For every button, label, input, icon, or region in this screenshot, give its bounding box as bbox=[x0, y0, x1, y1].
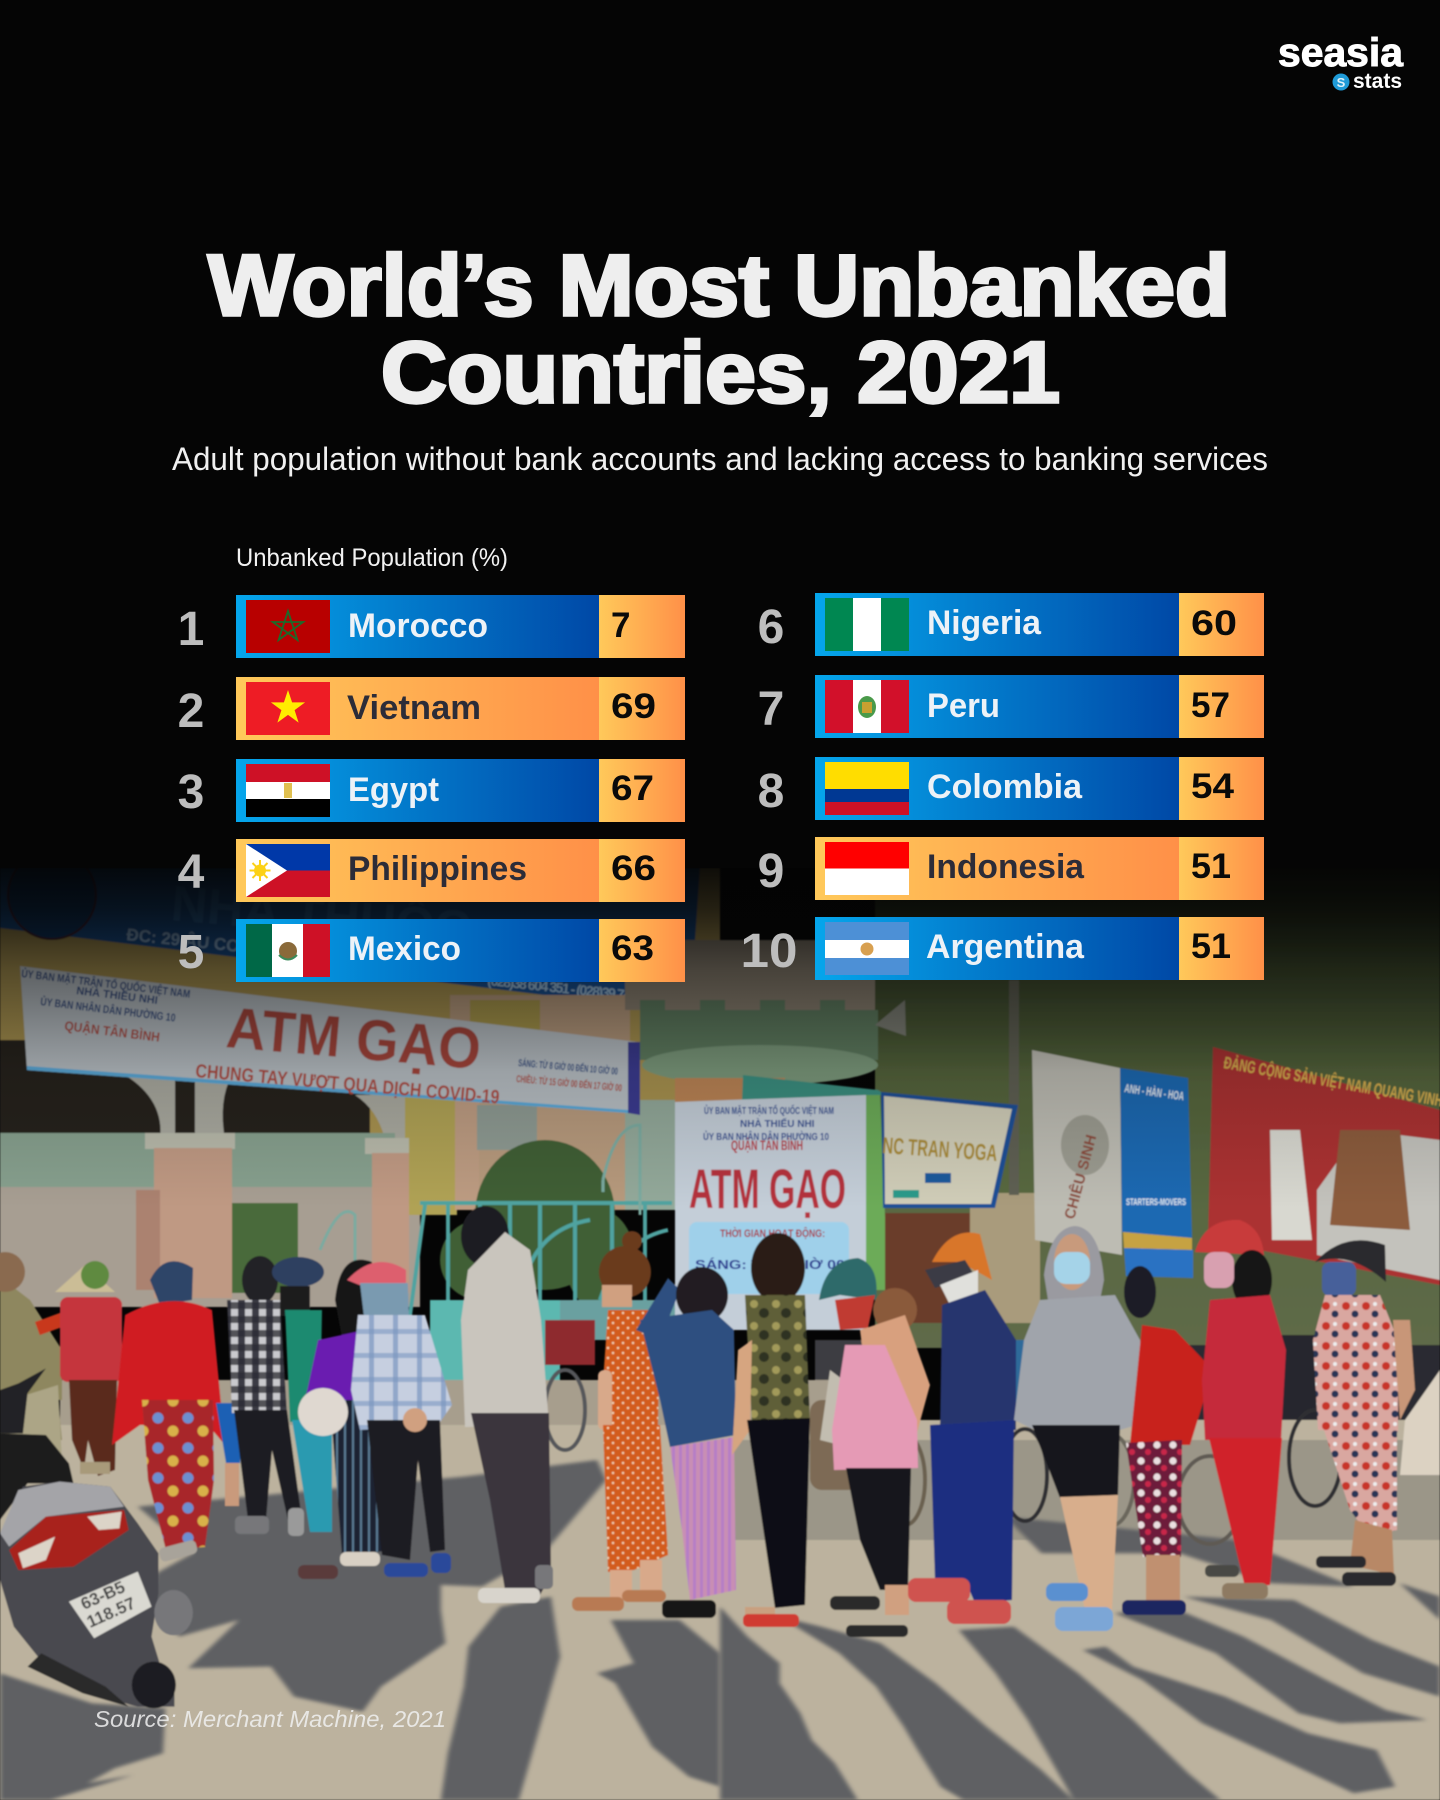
ranking row 7: Peru: Peru bbox=[927, 687, 1000, 725]
ranking row 1: Morocco bbox=[178, 595, 685, 658]
person: woman in orange polka dots bbox=[572, 1231, 668, 1611]
ranking row 2: Vietnam: 69 bbox=[611, 687, 656, 726]
photo: street ground bbox=[0, 1420, 1440, 1800]
person: woman in denim jacket with raised arm bbox=[636, 1267, 736, 1618]
photo: blue language-school board bbox=[1120, 1068, 1193, 1278]
photo: white poster board bbox=[1032, 1050, 1122, 1255]
ranking row 7: Peru: 57 bbox=[1191, 686, 1230, 725]
ranking row 6: Nigeria: 60 bbox=[1191, 604, 1237, 643]
photo: main ATM banner: CHUNG TAY VƯỢT QUA DỊCH COVID-19 bbox=[195, 1061, 500, 1109]
person: white hat held in hand bbox=[298, 1388, 348, 1436]
ranking row 1: Morocco: 1 bbox=[178, 603, 204, 656]
ranking row 6: Nigeria: Nigeria bbox=[927, 604, 1042, 642]
photo: parked bicycles bbox=[545, 1370, 1341, 1544]
ranking row 1: Morocco: 7 bbox=[611, 606, 630, 645]
ranking row 8: Colombia: 8 bbox=[758, 765, 784, 818]
photo: main ATM banner: ỦY BAN MẶT TRẬN TỔ QUỐC VIỆT NAM bbox=[21, 966, 191, 1001]
photo: pink wall segments bbox=[450, 995, 630, 1210]
photo: blue pharmacy sign: (028)38 604 351 - (028)39 749 760 bbox=[487, 972, 660, 1006]
photo: main ATM banner: ATM GẠO bbox=[224, 995, 484, 1082]
person: guard in khaki bbox=[0, 1252, 63, 1454]
photo: main ATM banner: SÁNG: TỪ 8 GIỜ 00 ĐẾN 10 GIỜ 00 bbox=[518, 1056, 619, 1078]
ranking row 1: Morocco: Morocco bbox=[348, 607, 488, 645]
photo: arches bbox=[125, 1075, 406, 1140]
ranking row 3: Egypt: Egypt bbox=[348, 771, 439, 809]
photo: top dark gradient overlay bbox=[0, 868, 1440, 1208]
ranking row 9: Indonesia: 9 bbox=[758, 845, 784, 898]
logo: seasia stats bbox=[1278, 31, 1404, 93]
photo: blue pharmacy sign: NHÀ THUỐC bbox=[169, 874, 473, 957]
photo: green strip sign bbox=[742, 1075, 888, 1290]
title bbox=[208, 238, 1230, 421]
ranking row 6: Nigeria: 6 bbox=[758, 601, 784, 654]
photo: red scooter at left: 63-B5 bbox=[78, 1577, 128, 1614]
person: woman with purple top and striped pants bbox=[298, 1258, 382, 1580]
ranking row 10: Argentina: Argentina bbox=[926, 928, 1085, 966]
photo: centre ATM sign: QUẬN TÂN BÌNH bbox=[731, 1136, 803, 1153]
ranking row 3: Egypt: 3 bbox=[178, 766, 204, 819]
ranking row 8: Colombia: Colombia bbox=[927, 768, 1083, 806]
ranking row 4: Philippines bbox=[178, 839, 685, 902]
photo: centre ATM sign: THỜI GIAN HOẠT ĐỘNG: bbox=[720, 1227, 825, 1240]
ranking row 10: Argentina bbox=[740, 917, 1264, 980]
photo: garden in archway bbox=[232, 1203, 298, 1293]
person: woman in pink tank top and helmet bbox=[819, 1258, 930, 1637]
photo: green tower bbox=[625, 940, 906, 1108]
ranking row 5: Mexico: Mexico bbox=[348, 930, 461, 968]
source note: Source: Merchant Machine, 2021 bbox=[94, 1706, 446, 1732]
photo: centre ATM sign: ỦY BAN MẶT TRẬN TỔ QUỐC VIỆT NAM bbox=[704, 1103, 834, 1117]
photo: main ATM banner bbox=[20, 966, 640, 1115]
flag: Vietnam bbox=[246, 682, 330, 735]
photo: sign pole bbox=[1009, 980, 1019, 1195]
person: figure in blue leggings bbox=[216, 1403, 243, 1506]
photo: main ATM banner: ỦY BAN NHÂN DÂN PHƯỜNG 10 bbox=[40, 995, 176, 1025]
ranking row 6: Nigeria bbox=[758, 593, 1264, 656]
logo: seasia stats: stats bbox=[1353, 70, 1402, 93]
photo: ground-floor wall bbox=[0, 1187, 420, 1307]
photo: background group of motorbikes bbox=[814, 1334, 1440, 1421]
photo: yoga sign bbox=[881, 1092, 1018, 1208]
title: Countries, 2021 bbox=[381, 325, 1060, 421]
person: woman in teal top and helmet bbox=[272, 1257, 332, 1532]
ranking row 2: Vietnam: 2 bbox=[178, 685, 204, 738]
ranking row 5: Mexico: 5 bbox=[178, 926, 204, 979]
subtitle: Adult population without bank accounts and lacking access to banking services bbox=[172, 441, 1268, 477]
photo: pink columns bbox=[136, 1133, 409, 1298]
column heading: unbanked population: Unbanked Population (%) bbox=[236, 544, 508, 572]
person: woman in red pyjamas and helmet bbox=[1195, 1220, 1286, 1599]
photo: centre ATM sign: ATM GẠO bbox=[689, 1157, 846, 1220]
photo: blue pharmacy sign bbox=[0, 868, 699, 996]
flag: Mexico bbox=[246, 924, 330, 977]
photo: shopping bag at right edge bbox=[1400, 1370, 1440, 1475]
title: World’s Most Unbanked bbox=[208, 238, 1230, 334]
flag: Morocco bbox=[246, 600, 330, 653]
logo: seasia stats: seasia bbox=[1278, 31, 1404, 75]
ranking row 8: Colombia: 54 bbox=[1191, 767, 1235, 806]
ranking row 9: Indonesia bbox=[758, 837, 1264, 900]
photo: main ATM banner: QUẬN TÂN BÌNH bbox=[64, 1018, 161, 1045]
ranking row 4: Philippines: 4 bbox=[178, 846, 205, 899]
person: man in black helmet and plaid shirt bbox=[227, 1256, 304, 1536]
photo: white poster board: CHIÊU SINH bbox=[1060, 1133, 1100, 1221]
photo: brown door bbox=[885, 1213, 970, 1323]
photo: red propaganda billboard bbox=[1208, 1047, 1440, 1285]
photo: yellow wall and windows bbox=[405, 1095, 675, 1215]
ranking row 5: Mexico: 63 bbox=[611, 929, 654, 968]
photo: centre ATM sign: ỦY BAN NHÂN DÂN PHƯỜNG 10 bbox=[703, 1130, 829, 1143]
photo: wall behind posters bbox=[970, 1193, 1040, 1323]
person: woman with short hair and camo shirt bbox=[732, 1233, 810, 1627]
photo: motorbike at bike rack bbox=[545, 1320, 870, 1490]
ranking row 10: Argentina: 10 bbox=[740, 925, 798, 978]
flag: Indonesia bbox=[825, 842, 909, 895]
person: tall man in white shirt bbox=[461, 1206, 553, 1603]
person: woman in red hoodie bbox=[112, 1261, 225, 1563]
flag: Colombia bbox=[825, 762, 909, 815]
logo: blue S coin: S bbox=[1337, 75, 1346, 90]
photo: gate bbox=[408, 1203, 675, 1405]
photo: blue language-school board: STARTERS-MOVERS bbox=[1126, 1197, 1186, 1207]
ranking row 4: Philippines: Philippines bbox=[348, 850, 527, 888]
flag: Peru bbox=[825, 680, 909, 733]
photo: street lamps bbox=[320, 1125, 640, 1270]
person: woman with pink cap and plaid shirt bbox=[347, 1262, 452, 1577]
photo: main ATM banner: NHÀ THIẾU NHI bbox=[76, 984, 158, 1007]
photo: balcony green band bbox=[0, 1133, 395, 1189]
photo: centre ATM sign: NHÀ THIẾU NHI bbox=[740, 1117, 815, 1130]
photo: blue pharmacy sign: ĐC: 29 ÂU CƠ bbox=[126, 925, 242, 956]
background photo: queue at rice ATM bbox=[0, 851, 1440, 1800]
ranking row 3: Egypt bbox=[178, 759, 685, 822]
person: man with conical hat bbox=[55, 1261, 122, 1476]
photo: centre ATM sign bbox=[675, 1095, 866, 1330]
photo: yoga sign: NC TRAN YOGA bbox=[882, 1132, 998, 1166]
ranking row 9: Indonesia: 51 bbox=[1191, 847, 1231, 886]
person: woman in floral set and bucket hat bbox=[1313, 1240, 1415, 1586]
flag: Philippines bbox=[246, 844, 330, 897]
ranking row 7: Peru bbox=[758, 675, 1264, 738]
photo: main ATM banner: CHIỀU: TỪ 15 GIỜ 00 ĐẾN 17 GIỜ 00 bbox=[516, 1072, 623, 1094]
ranking row 10: Argentina: 51 bbox=[1191, 927, 1231, 966]
ranking row 2: Vietnam: Vietnam bbox=[347, 689, 481, 727]
ranking row 3: Egypt: 67 bbox=[611, 769, 654, 808]
ranking row 2: Vietnam bbox=[178, 677, 685, 740]
person: man in navy with orange helmet bbox=[908, 1233, 1016, 1624]
flag: Argentina bbox=[825, 922, 909, 975]
photo: upper building wall bbox=[0, 868, 721, 1134]
photo: tree canopy background bbox=[875, 868, 1440, 1348]
photo: red scooter at left bbox=[0, 1368, 193, 1708]
photo: cast shadows left bbox=[0, 1460, 720, 1800]
person: woman in grey hoodie bbox=[1014, 1226, 1152, 1631]
ranking row 7: Peru: 7 bbox=[758, 683, 784, 736]
photo: red scooter at left: 118.57 bbox=[84, 1594, 138, 1632]
person: woman in red jacket and floral pants bbox=[1122, 1266, 1213, 1615]
photo: tree behind gate bbox=[440, 1140, 635, 1310]
photo: cast shadows right bbox=[720, 1517, 1440, 1800]
ranking row 5: Mexico bbox=[178, 919, 685, 982]
ranking row 9: Indonesia: Indonesia bbox=[927, 848, 1085, 886]
ranking row 4: Philippines: 66 bbox=[611, 849, 656, 888]
photo: arcade interior bbox=[0, 1040, 370, 1140]
photo: blue language-school board: ANH - HÀN - HOA bbox=[1124, 1080, 1185, 1103]
flag: Nigeria bbox=[825, 598, 909, 651]
flag: Egypt bbox=[246, 764, 330, 817]
ranking row 8: Colombia bbox=[758, 757, 1264, 820]
photo: centre ATM sign: SÁNG: TỪ 8 GIỜ 00 bbox=[695, 1257, 845, 1272]
